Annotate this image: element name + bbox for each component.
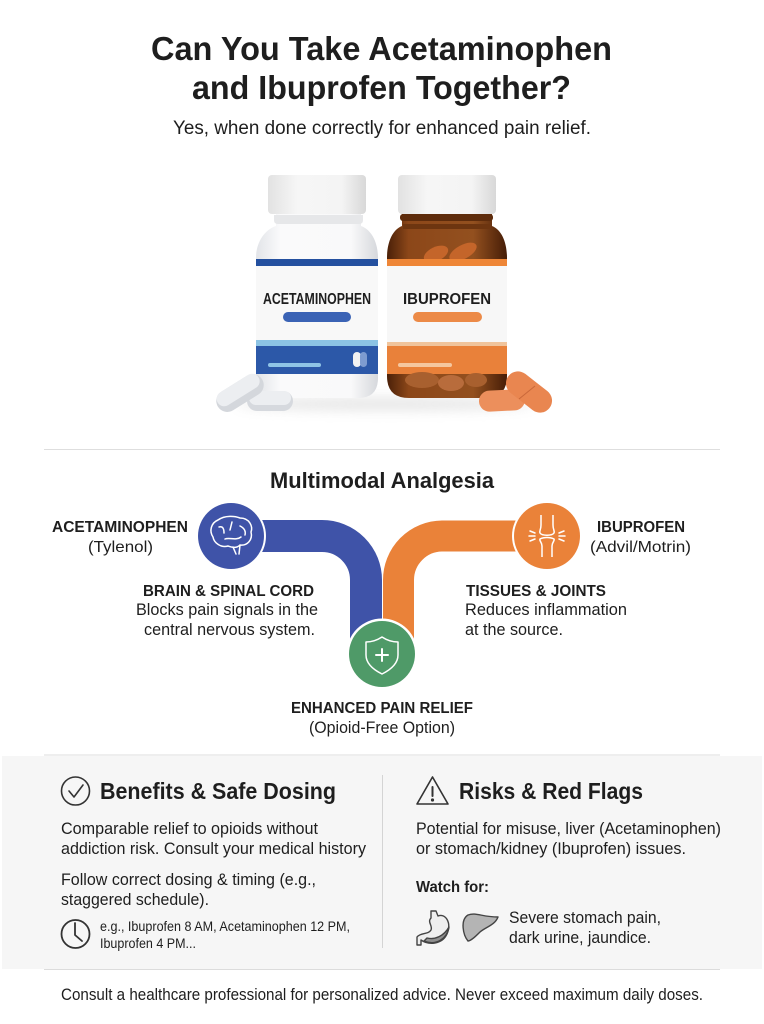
- icon: brain: [196, 501, 266, 571]
- footer note: Consult a healthcare professional for personalized advice. Never exceed maximum daily doses.: [61, 985, 703, 1004]
- heading: multimodal analgesia: Multimodal Analgesia: [270, 468, 494, 493]
- text: risks: Potential for misuse, liver (Acetaminophen): [416, 819, 721, 838]
- title: [151, 30, 612, 106]
- text: symptoms: dark urine, jaundice.: [509, 928, 651, 947]
- icon: liver: [463, 914, 498, 941]
- bottle: ibuprofen: [387, 175, 507, 398]
- icon: shield: [346, 618, 418, 690]
- text: symptoms: Severe stomach pain,: [509, 908, 661, 927]
- label: acetaminophen: (Tylenol): [88, 539, 153, 556]
- text: brain and spinal cord: central nervous system.: [144, 621, 315, 639]
- label: ibuprofen: [590, 519, 691, 556]
- text: benefits: addiction risk. Consult your medical history: [61, 839, 366, 858]
- text: tissues and joints: TISSUES & JOINTS: [466, 583, 606, 600]
- title: and Ibuprofen Together?: [192, 69, 571, 106]
- label: acetaminophen: ACETAMINOPHEN: [52, 519, 188, 536]
- text: watch for: Watch for:: [416, 879, 489, 896]
- icon: stomach: [417, 911, 449, 945]
- bottle: ibuprofen: IBUPROFEN: [403, 291, 491, 308]
- illustration: medicine bottles: [212, 175, 557, 417]
- title: Can You Take Acetaminophen: [151, 30, 612, 67]
- text: enhanced pain relief: (Opioid-Free Option): [309, 719, 455, 737]
- text: dosing: Follow correct dosing & timing (e.g.,: [61, 870, 316, 889]
- text: brain and spinal cord: Blocks pain signals in the: [136, 601, 318, 619]
- text: tissues and joints: at the source.: [465, 621, 563, 639]
- pills: white tablets: [212, 370, 293, 416]
- text: schedule example: e.g., Ibuprofen 8 AM, Acetaminophen 12 PM,: [100, 918, 350, 934]
- text: dosing: [61, 870, 316, 909]
- subtitle: Yes, when done correctly for enhanced pain relief.: [173, 118, 591, 139]
- panel: benefits and risks: [2, 755, 762, 970]
- icon: warning triangle: [417, 777, 448, 804]
- text: brain and spinal cord: [136, 583, 318, 639]
- text: dosing: staggered schedule).: [61, 890, 209, 909]
- icon: check circle: [62, 777, 90, 805]
- text: risks: [416, 819, 721, 858]
- label: acetaminophen: [52, 519, 188, 556]
- text: tissues and joints: [465, 583, 627, 639]
- pathway: orange: [398, 536, 530, 650]
- text: tissues and joints: Reduces inflammation: [465, 601, 627, 619]
- icon: clock: [62, 920, 90, 948]
- bottle: acetaminophen: ACETAMINOPHEN: [263, 291, 371, 308]
- text: benefits: [61, 819, 366, 858]
- text: brain and spinal cord: BRAIN & SPINAL CORD: [143, 583, 314, 600]
- text: enhanced pain relief: [291, 700, 473, 737]
- pills: orange caplets: [478, 367, 557, 417]
- text: schedule example: [100, 918, 350, 951]
- diagram: converging pathways: [196, 501, 582, 690]
- label: ibuprofen: IBUPROFEN: [597, 519, 685, 536]
- bottle: acetaminophen: [256, 175, 378, 398]
- label: ibuprofen: (Advil/Motrin): [590, 539, 691, 556]
- text: enhanced pain relief: ENHANCED PAIN RELIEF: [291, 700, 473, 717]
- text: symptoms: [509, 908, 661, 947]
- text: benefits: Comparable relief to opioids without: [61, 819, 318, 838]
- heading: benefits and safe dosing: Benefits & Safe Dosing: [100, 778, 336, 804]
- pathway: blue: [250, 536, 366, 650]
- text: schedule example: Ibuprofen 4 PM...: [100, 935, 196, 951]
- icon: joint: [512, 501, 582, 571]
- heading: risks and red flags: Risks & Red Flags: [459, 778, 643, 804]
- text: risks: or stomach/kidney (Ibuprofen) issues.: [416, 839, 686, 858]
